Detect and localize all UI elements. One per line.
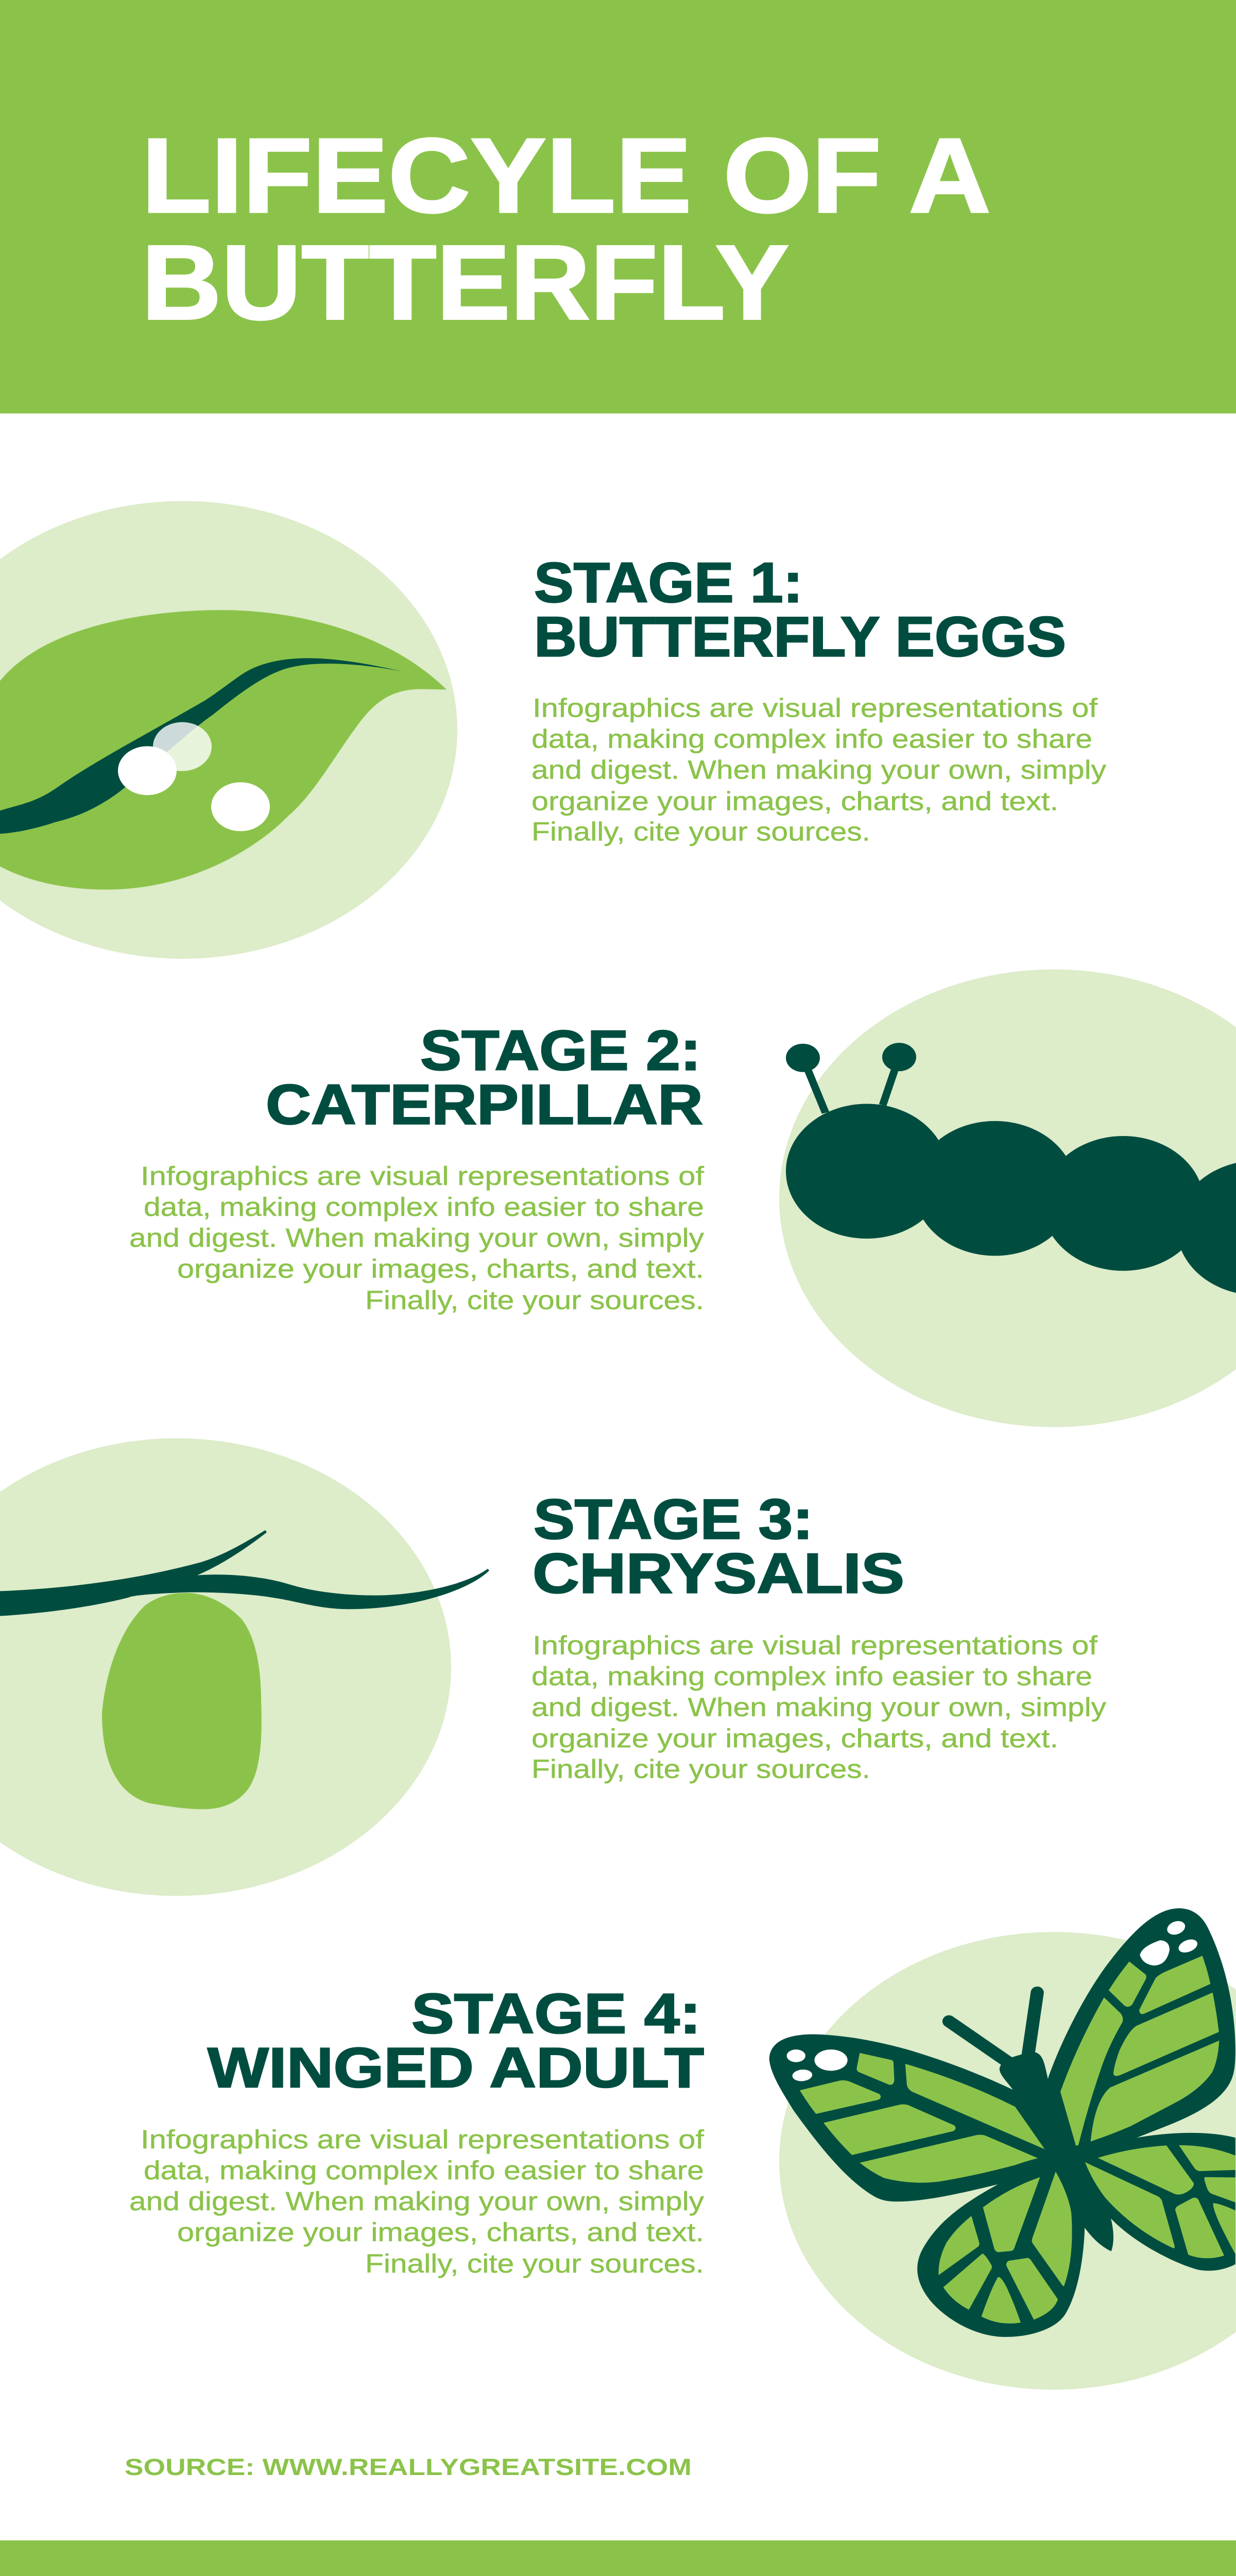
body text: stage 4: data, making complex info easier to share <box>144 2156 704 2185</box>
background circle <box>779 970 1236 1427</box>
source line: SOURCE: WWW.REALLYGREATSITE.COM <box>125 2454 692 2480</box>
hindwing cells: right <box>1085 2145 1235 2258</box>
body text: stage 2: data, making complex info easier to share <box>144 1192 704 1222</box>
forewing cells: right <box>1060 1956 1219 2146</box>
body text: stage 2: Finally, cite your sources. <box>365 1285 704 1315</box>
heading: stage 4: STAGE 4: <box>411 1982 701 2045</box>
chrysalis <box>102 1593 262 1809</box>
illustration: butterfly <box>769 1908 1235 2337</box>
body text: stage 4: Finally, cite your sources. <box>365 2249 704 2278</box>
background circle <box>0 1438 451 1896</box>
background circle <box>779 1932 1236 2389</box>
title: LIFECYLE OF A <box>142 116 991 235</box>
body text: stage 1: Infographics are visual representations of <box>533 693 1097 723</box>
body text: stage 4: organize your images, charts, and text. <box>177 2217 704 2247</box>
body text: stage 2 <box>129 1161 704 1315</box>
butterfly antennae <box>949 1993 1037 2061</box>
caterpillar body segments <box>786 1104 1236 1295</box>
illustration: chrysalis on branch <box>0 1438 489 1896</box>
body text: stage 3: and digest. When making your own, simply <box>531 1692 1106 1722</box>
heading: stage 4: WINGED ADULT <box>208 2036 704 2099</box>
body text: stage 2: organize your images, charts, and text. <box>177 1254 704 1283</box>
body text: stage 2: Infographics are visual representations of <box>141 1161 704 1191</box>
heading: stage 4 <box>208 1982 704 2099</box>
leaf <box>0 610 447 890</box>
forewing cells: left <box>800 2053 1045 2183</box>
background circle <box>0 501 457 959</box>
heading: stage 1: STAGE 1: <box>534 551 803 614</box>
illustration: leaf with eggs <box>0 501 457 959</box>
heading: stage 2: CATERPILLAR <box>266 1073 703 1136</box>
heading: stage 3 <box>533 1488 904 1605</box>
body text: stage 3: Finally, cite your sources. <box>531 1754 870 1784</box>
body text: stage 3: organize your images, charts, and text. <box>531 1723 1058 1753</box>
body text: stage 3: data, making complex info easier to share <box>531 1662 1092 1691</box>
panel: stage 3 chrysalis <box>0 1438 1106 1896</box>
body text: stage 3: Infographics are visual representations of <box>533 1631 1097 1660</box>
illustration: caterpillar <box>779 970 1236 1427</box>
body text: stage 2: and digest. When making your own, simply <box>129 1223 704 1252</box>
body text: stage 1: organize your images, charts, and text. <box>531 786 1058 816</box>
body text: stage 4 <box>129 2125 704 2278</box>
leaf vein <box>0 658 402 834</box>
hindwing cells: left <box>938 2172 1072 2324</box>
footer bar <box>0 2540 1236 2576</box>
egg: lower <box>211 782 270 831</box>
egg: translucent <box>153 722 212 771</box>
heading: stage 2: STAGE 2: <box>420 1019 701 1082</box>
heading: stage 2 <box>266 1019 703 1136</box>
caterpillar antennae <box>786 1043 916 1113</box>
panel: stage 1 butterfly eggs <box>0 501 1106 959</box>
butterfly silhouette <box>769 1908 1235 2337</box>
body text: stage 4: Infographics are visual representations of <box>141 2125 704 2154</box>
panel: stage 4 winged adult <box>129 1908 1236 2389</box>
header banner <box>0 0 1236 413</box>
body text: stage 4: and digest. When making your own, simply <box>129 2187 704 2216</box>
body text: stage 1: Finally, cite your sources. <box>531 817 870 846</box>
panel: stage 2 caterpillar <box>129 970 1236 1427</box>
title <box>142 116 991 342</box>
heading: stage 3: STAGE 3: <box>534 1488 813 1551</box>
heading: stage 3: CHRYSALIS <box>533 1542 904 1605</box>
body text: stage 1: and digest. When making your own, simply <box>531 755 1106 785</box>
body text: stage 1 <box>531 693 1106 846</box>
body text: stage 3 <box>531 1631 1106 1784</box>
branch <box>0 1530 489 1616</box>
egg: front <box>118 746 177 795</box>
heading: stage 1 <box>534 551 1066 668</box>
heading: stage 1: BUTTERFLY EGGS <box>534 605 1066 668</box>
white wing spots <box>787 1919 1199 2082</box>
title: BUTTERFLY <box>142 224 789 342</box>
body text: stage 1: data, making complex info easier to share <box>531 724 1092 754</box>
